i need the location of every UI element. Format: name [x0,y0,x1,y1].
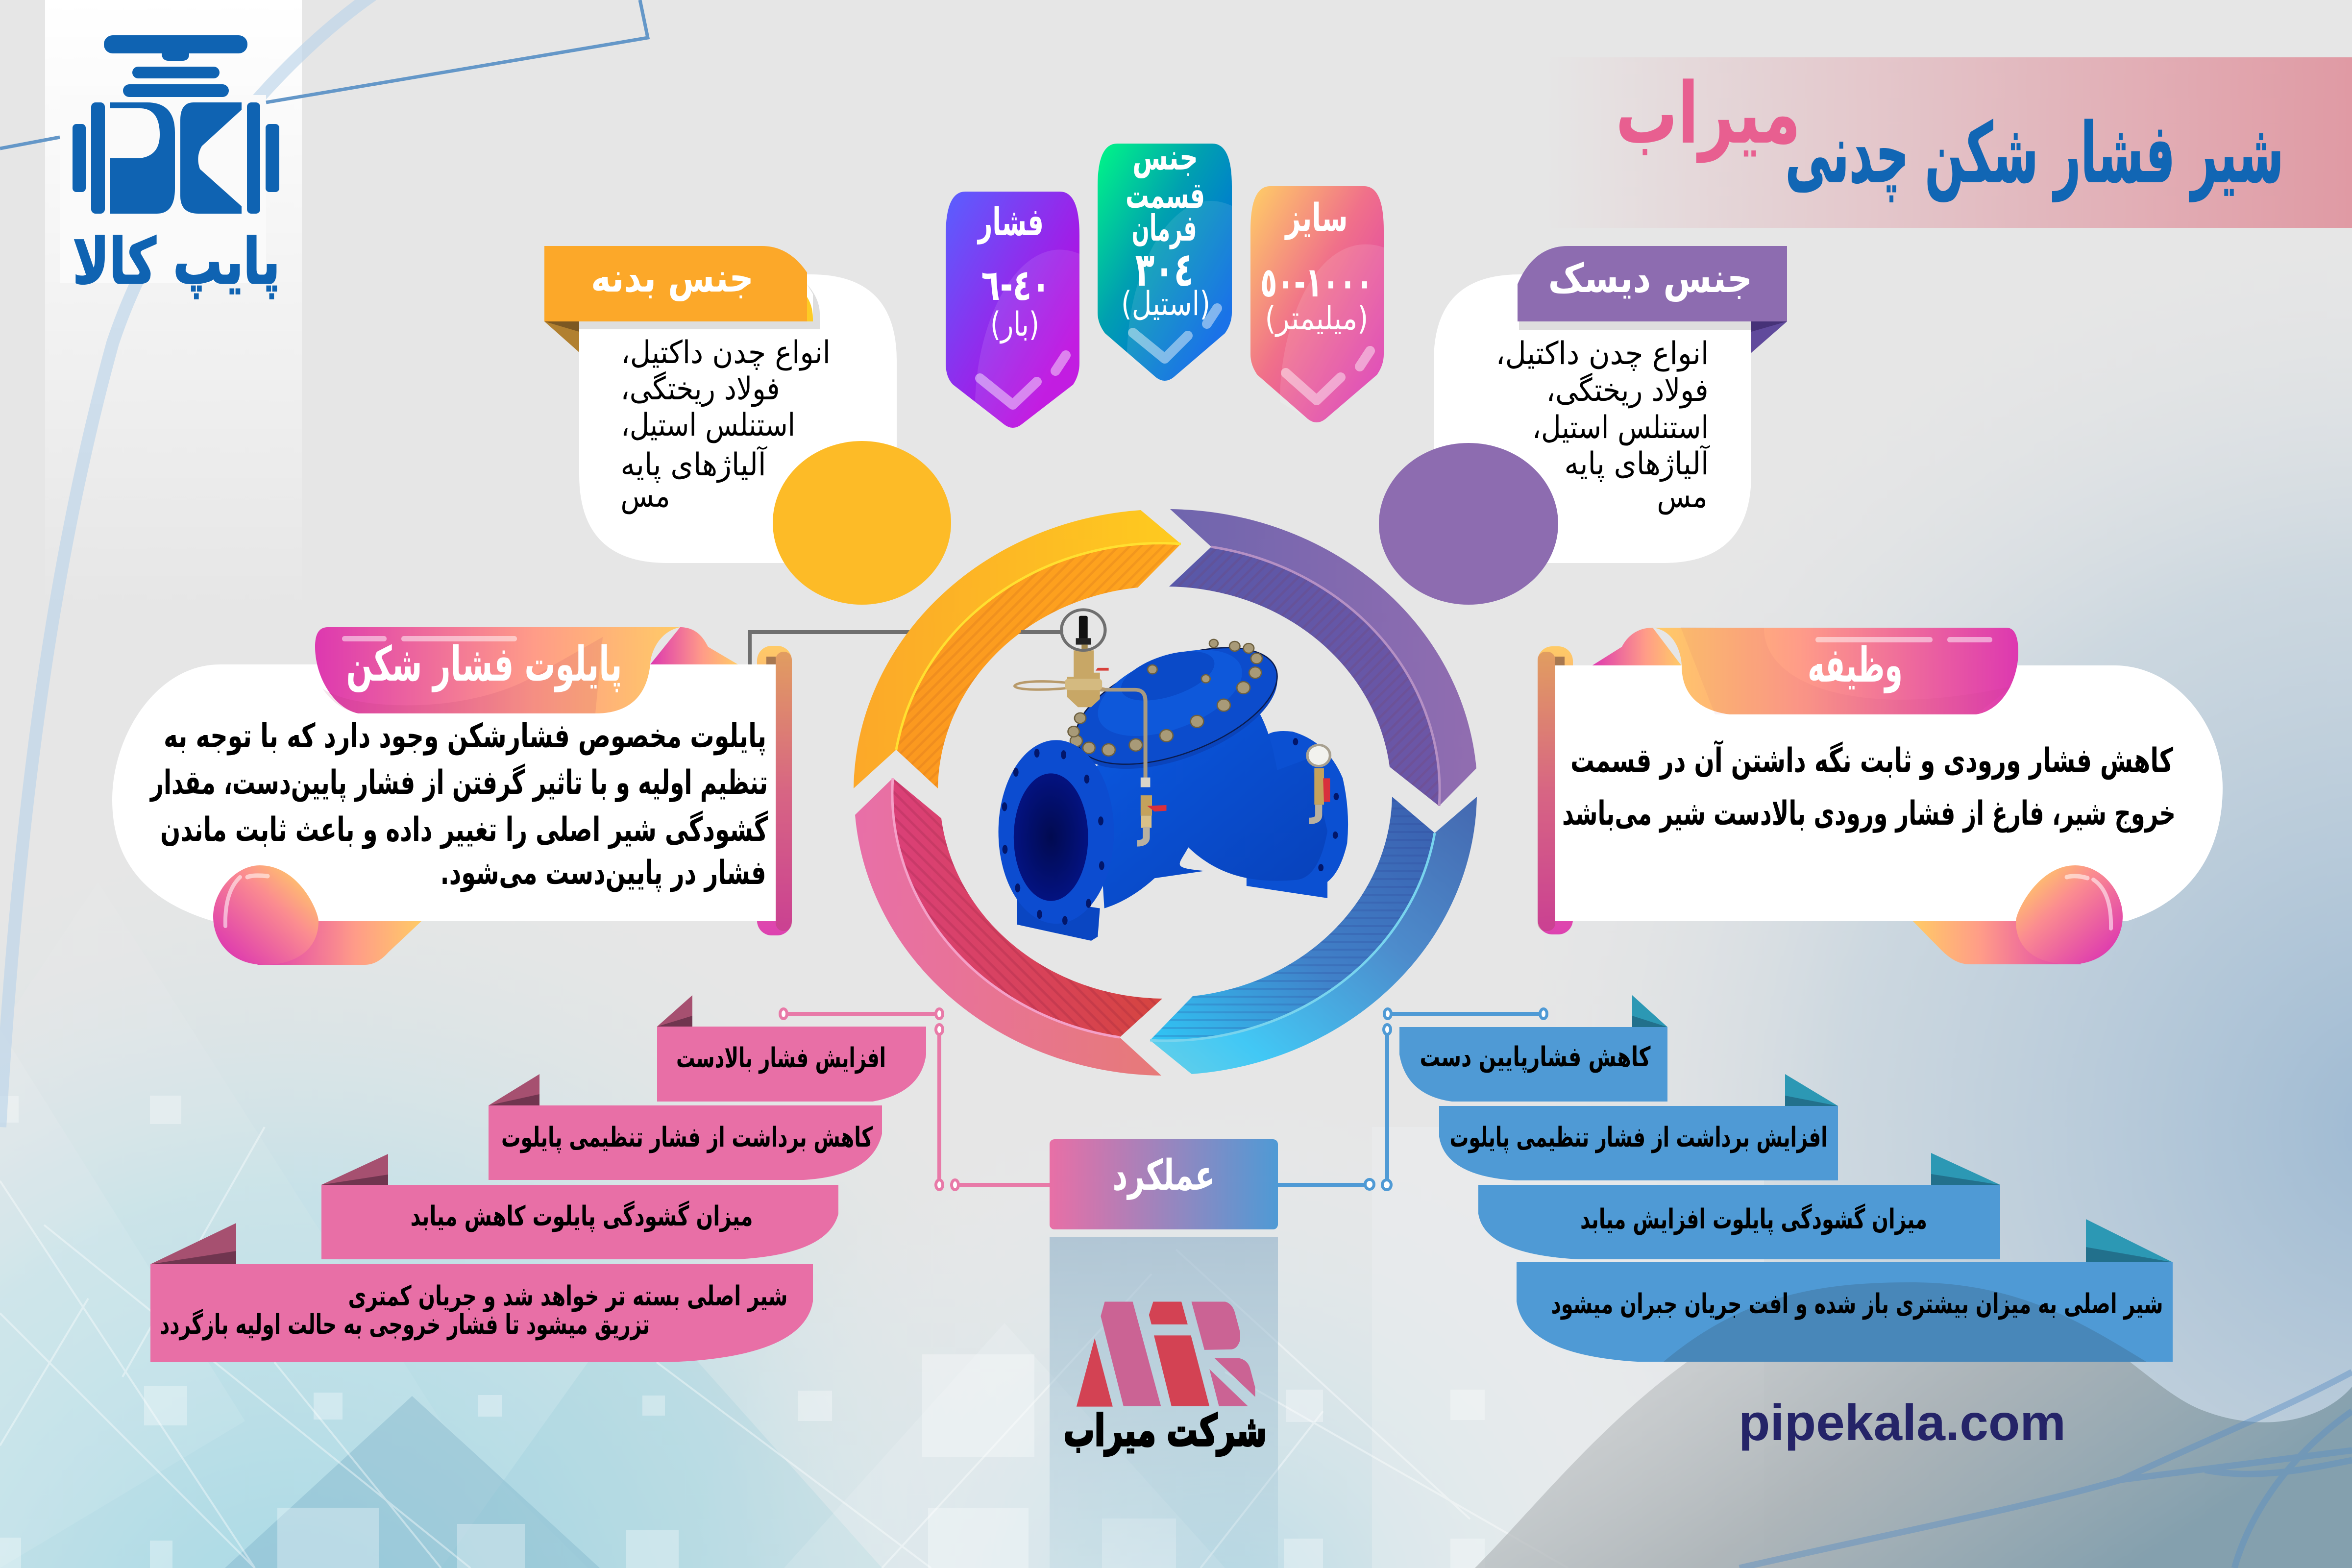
icon: Mirab mark [1077,1301,1255,1407]
scroll heading ribbon [315,627,680,713]
purple circle [1379,443,1558,605]
ribbon 1 [1399,995,1667,1102]
pilot description [149,717,768,892]
body material list: آلیاژهای پایه [620,445,767,483]
tag: control part material: قسمت [1126,174,1205,217]
logo text: پایپ کالا [73,225,280,299]
pilot description: پایلوت مخصوص فشارشکن وجود دارد که با توجه به [164,717,766,756]
connector: pink [780,1009,1050,1190]
ribbons: left steps [150,995,926,1362]
Mirab logotype: شرکت میراب [1063,1405,1267,1456]
ribbon 1: کاهش فشارپایین دست [1420,1041,1651,1073]
scroll heading ribbon: وظیفه [1808,637,1903,694]
panel: Mirab logo [1050,1237,1278,1568]
title: brand: میراب [1616,64,1801,163]
decorative line [0,0,648,148]
function description [1562,739,2176,833]
ribbon 2 [489,1074,882,1180]
pilot connector inner [1021,630,1063,634]
tag: control part material [1098,136,1232,381]
panel: function scroll [1538,627,2223,964]
ribbons: right steps [1399,995,2173,1362]
valve illustration [999,610,1348,941]
scroll sheet [1555,665,2223,921]
ribbon 3 [321,1154,838,1259]
website: pipekala.com [1739,1395,2066,1451]
ribbon 3: میزان گشودگی پایلوت افزایش میابد [1580,1203,1927,1235]
tag: pressure: فشار [977,200,1044,245]
panel: pressure pilot scroll [112,627,792,965]
ribbon 1 [657,995,926,1102]
folded corner [1751,321,1787,353]
scroll heading ribbon [1653,627,2018,714]
ribbon 2 [1439,1074,1838,1180]
tag: pressure: ٦-٤٠ [981,260,1051,310]
lower fittings [1137,745,1330,843]
tag: pressure [946,192,1079,428]
disc material list [1495,336,1710,515]
segment: yellow [854,510,1181,788]
tag: control part material: فرمان [1132,207,1197,249]
logo panel [0,0,648,1127]
left flange [1017,896,1100,941]
tag: pressure: (بار) [990,305,1039,344]
tag: size: (میلیمتر) [1265,299,1368,337]
ribbon 2: افزایش برداشت از فشار تنظیمی پایلوت [1449,1122,1828,1153]
tag: control part material: جنس [1132,136,1198,178]
tag: size [1250,186,1384,422]
ribbon 4 [1517,1219,2173,1362]
connector: blue [1278,1009,1547,1190]
segment: blue [1150,797,1477,1074]
yellow circle [773,441,951,605]
bonnet [1057,627,1296,793]
heading: performance: عملکرد [1112,1151,1215,1200]
panel: body material [544,246,951,605]
ribbon 3: میزان گشودگی پایلوت کاهش میابد [411,1200,753,1232]
scroll roll [2016,865,2123,964]
scroll rod [757,646,792,935]
pilot valve [1065,616,1109,707]
ribbon 4 [150,1223,813,1362]
scroll heading ribbon: پایلوت فشار شکن [346,637,622,692]
pilot description: فشار در پایین‌دست می‌شود. [440,854,766,892]
tag: control part material: ٣٠٤ [1135,242,1194,297]
disc material list: فولاد ریختگی، [1546,372,1708,409]
ribbon 2: کاهش برداشت از فشار تنظیمی پایلوت [501,1122,873,1153]
disc material list: انواع چدن داکتیل، [1495,336,1709,372]
ribbon 3 [1478,1153,2000,1259]
heading tab [544,246,807,321]
tag: size: ٥٠-١٠٠٠ [1260,258,1373,306]
ribbon 1: افزایش فشار بالادست [676,1042,886,1074]
panel: disc material [1379,246,1787,605]
body material list: فولاد ریختگی، [620,371,780,407]
heading tab: جنس دیسک [1548,255,1752,302]
ribbon 4: تزریق میشود تا فشار خروجی به حالت اولیه بازگردد [160,1309,650,1341]
scroll rod [1538,646,1573,934]
title band [1544,57,2352,228]
body material list: استنلس استیل، [621,407,795,443]
ribbon 4: شیر اصلی بسته تر خواهد شد و جریان کمتری [348,1280,788,1312]
tag: control part material: (استیل) [1121,285,1210,323]
pilot description: تنظیم اولیه و با تاثیر گرفتن از فشار پایین‌دست، مقدار [149,763,768,802]
heading tab [1518,246,1787,321]
segment: pink [855,778,1162,1076]
disc material list: آلیاژهای پایه [1564,444,1710,482]
connector: pilot line [750,632,1063,664]
folded corner [544,321,579,352]
segment: purple [1169,509,1476,806]
bolts [1068,639,1262,756]
body material list: مس [620,478,670,514]
scroll roll [213,865,318,965]
pilot ring [1061,610,1105,650]
chart: cycle ring [854,509,1477,1076]
flange holes [1002,738,1339,925]
heading tab: جنس بدنه [591,255,754,301]
pilot pipework [1015,682,1146,780]
tag: size: سایز [1284,196,1348,240]
right flange [1247,731,1348,898]
valve body [1096,713,1327,908]
disc material list: مس [1657,479,1707,515]
icon: pipekala valve logo [73,35,279,214]
disc material list: استنلس استیل، [1532,410,1709,446]
body material list [620,335,831,514]
pilot description: گشودگی شیر اصلی را تغییر داده و باعث ثابت ماندن [160,810,768,849]
scroll sheet [112,664,776,921]
heading: performance [1050,1139,1278,1229]
body material list: انواع چدن داکتیل، [621,335,831,371]
